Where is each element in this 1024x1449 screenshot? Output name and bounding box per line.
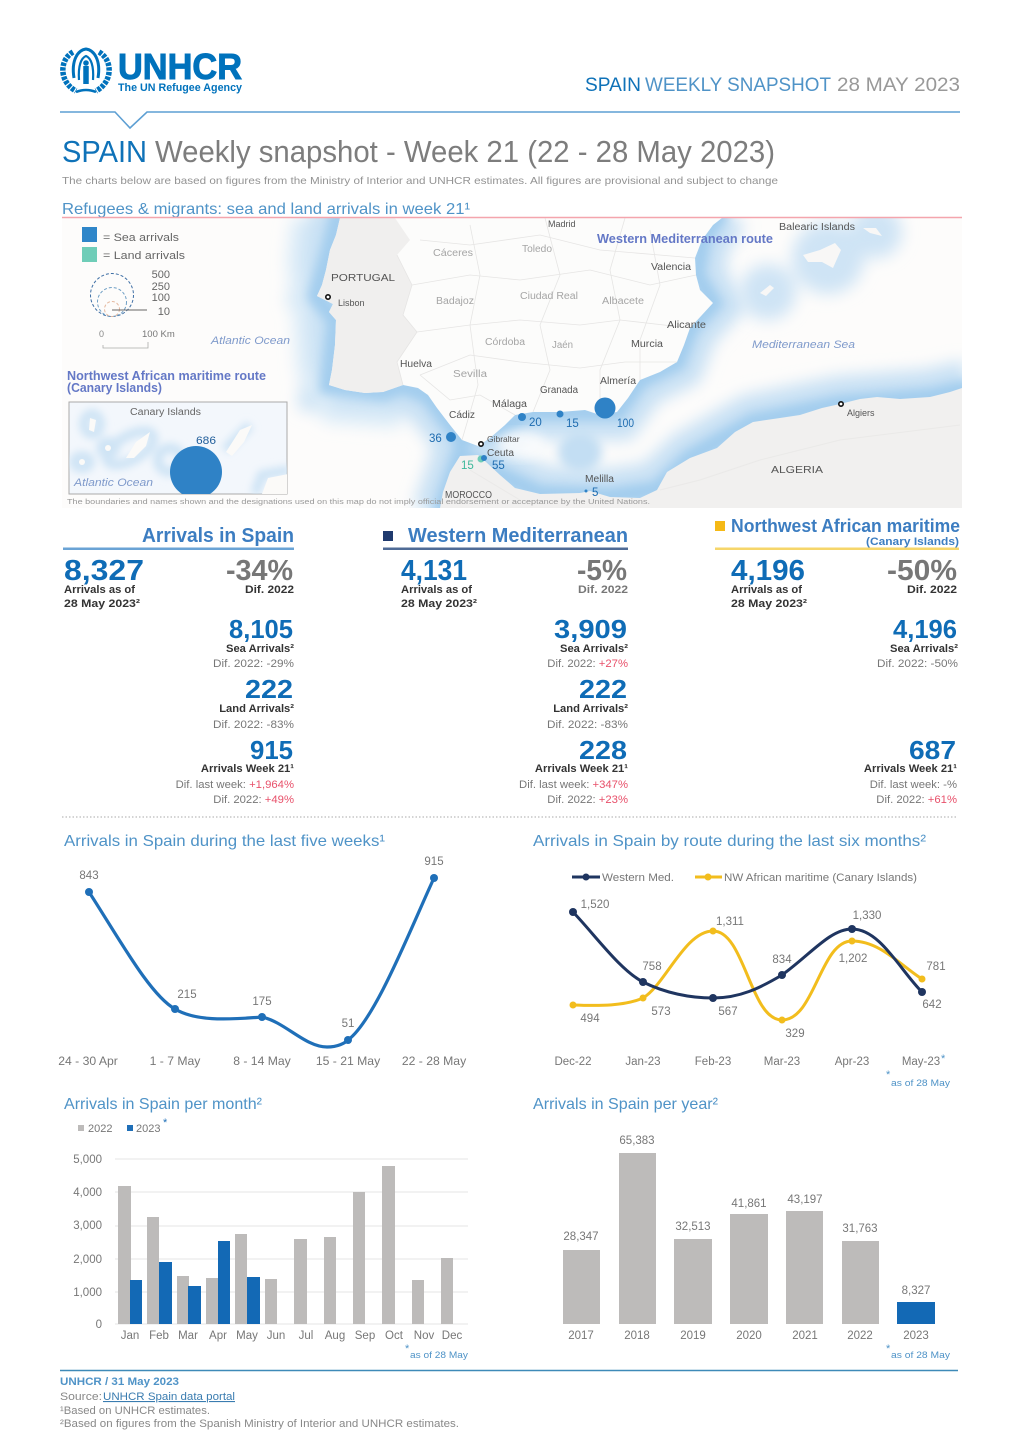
total arrivals: Arrivals as of — [64, 584, 135, 596]
value labels: 41,861 — [731, 1198, 767, 1210]
value labels: 843 — [79, 870, 99, 882]
scale bar — [99, 329, 175, 348]
chart heading: Arrivals in Spain per year² — [533, 1096, 719, 1113]
y axis labels: 0 — [96, 1319, 102, 1331]
legend labels: = Land arrivals — [103, 250, 186, 262]
place labels: Córdoba — [485, 337, 525, 348]
asterisk and note: * — [941, 1053, 946, 1065]
x axis labels: Dec — [442, 1330, 462, 1342]
sea arrivals — [547, 616, 628, 670]
x axis labels: Jan-23 — [625, 1056, 661, 1068]
total difference: -50% — [887, 555, 957, 587]
sea arrivals: 4,196 — [893, 616, 957, 644]
note — [886, 1343, 951, 1360]
place labels: Melilla — [585, 474, 614, 485]
inset map: Canary Islands — [69, 402, 290, 498]
place labels: ALGERIA — [771, 465, 823, 476]
weekly arrivals: 687 — [909, 737, 956, 765]
sea arrivals: Sea Arrivals² — [226, 643, 294, 655]
footer: ¹Based on UNHCR estimates. — [60, 1405, 210, 1417]
total arrivals: 28 May 2023² — [401, 598, 477, 610]
header rule with notch — [60, 112, 960, 128]
x axis labels: Apr — [209, 1330, 227, 1342]
y axis labels: 5,000 — [73, 1154, 102, 1166]
x axis labels: 2022 — [847, 1330, 873, 1342]
x axis labels: May-23 — [902, 1056, 940, 1068]
weekly arrivals: Dif. 2022: +49% — [213, 794, 294, 806]
x axis labels: Oct — [385, 1330, 404, 1342]
value labels: 758 — [642, 961, 662, 973]
place labels: Mediterranean Sea — [752, 339, 855, 351]
icon: laurel emblem — [63, 49, 109, 92]
x axis labels: Apr-23 — [835, 1056, 869, 1068]
proportional circles — [90, 274, 147, 316]
x axis labels: 2020 — [736, 1330, 762, 1342]
value labels: 32,513 — [675, 1221, 711, 1233]
x axis labels: 2019 — [680, 1330, 706, 1342]
note: * — [405, 1343, 410, 1355]
chart: per year — [533, 1096, 951, 1360]
chart legend: 2023 — [136, 1123, 160, 1135]
place labels: Cáceres — [433, 248, 473, 259]
total arrivals — [64, 555, 144, 610]
subtitle: The charts below are based on figures from the Ministry of Interior and UNHCR estimates. All figures are provisional and subject to change — [62, 175, 778, 187]
x axis labels: Jul — [299, 1330, 313, 1342]
weekly arrivals: Dif. last week: -% — [870, 779, 957, 791]
y axis labels: 4,000 — [73, 1187, 102, 1199]
place labels: Almería — [600, 376, 636, 387]
place labels: Murcia — [631, 339, 663, 350]
x axis labels — [554, 1056, 940, 1068]
map top rule — [62, 216, 962, 218]
marker: 36 — [429, 432, 456, 445]
bars 2023 — [130, 1241, 260, 1324]
bars 2022 — [118, 1166, 453, 1324]
x axis labels: Jun — [267, 1330, 285, 1342]
route label: Northwest African: (Canary Islands) — [67, 381, 162, 395]
value labels — [79, 856, 444, 1030]
place labels: Toledo — [522, 244, 552, 255]
x axis labels: 2023 — [903, 1330, 929, 1342]
total arrivals: Arrivals as of — [731, 584, 802, 596]
weekly arrivals — [176, 737, 294, 806]
weekly arrivals: 915 — [250, 737, 293, 765]
asterisk and note — [886, 1053, 951, 1088]
land arrivals: 222 — [245, 676, 293, 704]
map disclaimer: The boundaries and names shown and the designations used on this map do not imply official endorsement or acceptance by the United Nations. — [67, 499, 650, 506]
x axis labels: Aug — [325, 1330, 345, 1342]
place labels: Algiers — [847, 408, 875, 418]
city points — [326, 295, 843, 446]
x axis labels: Mar-23 — [764, 1056, 800, 1068]
circle values: 500 — [152, 269, 170, 281]
place labels: Ceuta — [487, 448, 514, 459]
land arrivals — [213, 676, 294, 731]
place labels: Ciudad Real — [520, 291, 578, 302]
marker: 20 — [518, 413, 542, 429]
marker: 100 — [594, 398, 634, 430]
value labels: 215 — [177, 989, 197, 1001]
weekly arrivals: Dif. 2022: +23% — [547, 794, 628, 806]
chart legend: Western Med. — [602, 872, 674, 884]
marker: Ceuta: 15 — [461, 460, 474, 472]
sea arrivals — [877, 616, 958, 670]
note: as of 28 May — [410, 1350, 469, 1360]
bars — [563, 1153, 935, 1324]
place labels: Sevilla — [453, 369, 487, 380]
place labels: Badajoz — [436, 296, 474, 307]
panel: map — [62, 206, 970, 515]
circle: Canary sea arrivals — [170, 446, 222, 498]
x axis labels: 2021 — [792, 1330, 818, 1342]
legend land swatch — [82, 247, 97, 262]
value labels: 51 — [342, 1018, 354, 1030]
route label: Northwest African: Northwest African maritime route — [67, 369, 266, 383]
total arrivals: 8,327 — [64, 555, 144, 587]
place labels: Balearic Islands — [779, 222, 855, 233]
x axis labels — [121, 1330, 462, 1342]
sea arrivals: Dif. 2022: -29% — [213, 658, 294, 670]
x axis labels: 15 - 21 May — [316, 1054, 381, 1068]
header right label — [585, 75, 960, 96]
chart heading: Arrivals in Spain by route during the last six months² — [533, 833, 927, 850]
sea arrivals — [213, 616, 294, 670]
footer: UNHCR Spain data portal — [103, 1391, 235, 1403]
marker: 100: 100 — [617, 418, 634, 430]
land arrivals: Dif. 2022: -83% — [213, 719, 294, 731]
land arrivals: 222 — [579, 676, 627, 704]
place labels: Valencia — [651, 262, 691, 273]
total arrivals: 28 May 2023² — [64, 598, 140, 610]
place labels: Madrid — [548, 219, 576, 229]
x axis labels: 2017 — [568, 1330, 594, 1342]
x axis labels: 1 - 7 May — [150, 1054, 201, 1068]
inset map: Canary Islands: Canary Islands — [130, 407, 201, 418]
chart legend — [572, 872, 917, 884]
value labels: 642 — [922, 999, 942, 1011]
logo wordmark: UNHCR — [118, 46, 242, 87]
place labels: Granada — [540, 385, 578, 396]
weekly arrivals: Dif. last week: +347% — [519, 779, 628, 791]
marker: Melilla: 5 — [592, 487, 598, 499]
place labels: Lisbon — [338, 298, 365, 308]
value labels: 1,202 — [839, 953, 867, 965]
value labels: 31,763 — [842, 1223, 878, 1235]
marker: 15: 15 — [566, 418, 579, 430]
weekly arrivals: Arrivals Week 21¹ — [535, 763, 628, 775]
x axis labels: Feb — [149, 1330, 169, 1342]
series: Western Med — [569, 908, 926, 1002]
place labels: MOROCCO — [445, 490, 492, 501]
scale bar: 0 — [99, 329, 104, 339]
value labels: 65,383 — [619, 1135, 655, 1147]
header right label: SPAIN — [585, 75, 641, 96]
sea arrivals: Sea Arrivals² — [890, 643, 958, 655]
land: Portugal — [317, 218, 417, 393]
chart: by route last six months — [533, 833, 951, 1088]
value labels: 8,327 — [902, 1285, 930, 1297]
x axis labels: Feb-23 — [695, 1056, 731, 1068]
map markers — [326, 295, 843, 499]
legend sea swatch — [82, 227, 97, 242]
x axis labels — [58, 1054, 467, 1068]
value labels: 43,197 — [787, 1194, 823, 1206]
value labels — [580, 899, 946, 1040]
value labels: 567 — [718, 1006, 738, 1018]
chart legend — [78, 1117, 168, 1135]
weekly arrivals: Arrivals Week 21¹ — [864, 763, 957, 775]
total arrivals — [731, 555, 807, 610]
value labels: 329 — [785, 1028, 805, 1040]
value labels: 28,347 — [563, 1231, 599, 1243]
marker: 36: 36 — [429, 433, 442, 445]
x axis labels: 8 - 14 May — [233, 1054, 292, 1068]
total arrivals: 28 May 2023² — [731, 598, 807, 610]
land arrivals: Land Arrivals² — [219, 703, 294, 715]
province borders — [397, 218, 696, 440]
legend labels: = Sea arrivals — [103, 232, 180, 244]
place labels: Huelva — [400, 359, 432, 370]
title: Weekly snapshot - Week 21 (22 - 28 May 2023) — [155, 134, 775, 169]
line series — [85, 874, 438, 1047]
circle values — [152, 269, 170, 318]
inset map: Canary Islands: 686 — [196, 435, 216, 447]
x axis labels: 22 - 28 May — [402, 1054, 467, 1068]
x axis labels: 24 - 30 Apr — [58, 1054, 118, 1068]
total difference: -34% — [226, 555, 293, 587]
x axis labels: Jan — [121, 1330, 139, 1342]
x axis labels: Sep — [355, 1330, 375, 1342]
value labels — [563, 1135, 930, 1297]
total arrivals: Arrivals as of — [401, 584, 472, 596]
y axis labels — [73, 1154, 102, 1331]
value labels: 834 — [772, 954, 792, 966]
weekly arrivals: Arrivals Week 21¹ — [201, 763, 294, 775]
sea arrivals: Dif. 2022: +27% — [547, 658, 628, 670]
x axis labels: Dec-22 — [554, 1056, 592, 1068]
route label: Northwest African — [67, 369, 266, 395]
note — [405, 1343, 469, 1360]
sea coastal glow: near shore — [317, 210, 970, 515]
chart heading: Arrivals in Spain during the last five weeks¹ — [64, 833, 385, 850]
value labels: 175 — [252, 996, 272, 1008]
land: North Africa — [440, 388, 962, 508]
scale bar: 100 Km — [142, 329, 175, 340]
x axis labels: 2018 — [624, 1330, 650, 1342]
weekly arrivals: 228 — [579, 737, 627, 765]
sea arrivals: 3,909 — [554, 616, 627, 644]
place labels: Gibraltar — [487, 434, 520, 444]
header right label: WEEKLY SNAPSHOT — [645, 75, 831, 96]
land arrivals — [547, 676, 628, 731]
footer: UNHCR / 31 May 2023 — [60, 1376, 179, 1388]
place labels: Atlantic Ocean — [210, 335, 290, 347]
series: NW African maritime — [570, 928, 926, 1024]
place labels: Cádiz — [449, 410, 475, 421]
circle values: 10 — [158, 306, 170, 318]
x axis labels: Mar — [178, 1330, 198, 1342]
heading — [715, 515, 960, 550]
weekly arrivals — [864, 737, 957, 806]
place labels — [210, 219, 875, 501]
total arrivals: 4,131 — [401, 555, 467, 587]
footer: Source: — [60, 1391, 102, 1403]
marker: Ceuta — [461, 455, 505, 472]
chart legend: NW African maritime (Canary Islands) — [724, 872, 917, 884]
weekly arrivals — [519, 737, 628, 806]
y axis labels: 3,000 — [73, 1220, 102, 1232]
total difference: -5% — [577, 555, 627, 587]
footer: ²Based on figures from the Spanish Ministry of Interior and UNHCR estimates. — [60, 1418, 459, 1430]
y axis labels: 2,000 — [73, 1254, 102, 1266]
chart legend: * — [163, 1117, 168, 1129]
total difference: Dif. 2022 — [907, 584, 957, 596]
marker: 15 — [556, 410, 579, 430]
marker: 20: 20 — [529, 417, 542, 429]
place labels: Albacete — [602, 296, 644, 307]
sea coastal glow: wide — [295, 210, 970, 515]
value labels: 1,330 — [853, 910, 881, 922]
x axis labels: May — [236, 1330, 258, 1342]
place labels: Jaén — [552, 340, 573, 351]
circle values: 250 — [152, 281, 170, 293]
panel: Western Mediterranean — [383, 525, 628, 806]
panel: Arrivals in Spain — [63, 525, 294, 806]
heading: Northwest African maritime — [731, 515, 960, 536]
chart: last five weeks — [58, 833, 467, 1068]
asterisk and note: * — [886, 1069, 891, 1081]
marker: Ceuta: 55 — [492, 460, 505, 472]
header right label: 28 MAY 2023 — [837, 75, 960, 96]
weekly arrivals: Dif. last week: +1,964% — [176, 779, 294, 791]
chart legend: 2022 — [88, 1123, 112, 1135]
value labels: 1,311 — [716, 916, 744, 928]
heading: Arrivals in Spain — [142, 525, 294, 547]
chart heading: Arrivals in Spain per month² — [64, 1096, 263, 1113]
total difference: Dif. 2022 — [578, 584, 628, 596]
place labels: PORTUGAL — [331, 273, 395, 284]
weekly arrivals: Dif. 2022: +61% — [876, 794, 957, 806]
value labels: 915 — [424, 856, 444, 868]
route label: Western Mediterranean: Western Mediterranean route — [597, 232, 773, 246]
place labels: Málaga — [492, 399, 527, 410]
sea arrivals: Dif. 2022: -50% — [877, 658, 958, 670]
panel: Northwest African maritime — [715, 515, 960, 806]
chart: per month — [64, 1096, 469, 1360]
value labels: 1,520 — [581, 899, 609, 911]
land arrivals: Land Arrivals² — [553, 703, 628, 715]
place labels: Alicante — [667, 320, 706, 331]
value labels: 573 — [651, 1006, 671, 1018]
legend — [82, 227, 186, 348]
note: as of 28 May — [891, 1350, 951, 1360]
heading: (Canary Islands) — [866, 536, 959, 548]
circle values: 100 — [152, 292, 170, 304]
title: SPAIN — [62, 134, 147, 169]
land arrivals: Dif. 2022: -83% — [547, 719, 628, 731]
land: Iberia — [317, 218, 722, 446]
map heading: Refugees & migrants: sea and land arrivals in week 21¹ — [62, 201, 470, 218]
UNHCR logo — [63, 46, 243, 94]
total arrivals — [401, 555, 477, 610]
marker: Melilla — [584, 487, 598, 499]
y axis labels: 1,000 — [73, 1287, 102, 1299]
legend labels — [103, 232, 186, 262]
sea arrivals: Sea Arrivals² — [560, 643, 628, 655]
total arrivals: 4,196 — [731, 555, 805, 587]
island glow — [740, 206, 902, 320]
value labels: 781 — [926, 961, 946, 973]
land: Balearic islands — [803, 243, 841, 268]
inset map: Canary Islands: Atlantic Ocean — [73, 477, 153, 489]
asterisk and note: as of 28 May — [891, 1078, 951, 1088]
sea arrivals: 8,105 — [229, 616, 293, 644]
note: * — [886, 1343, 891, 1355]
value labels: 494 — [580, 1013, 600, 1025]
total difference: Dif. 2022 — [245, 584, 294, 596]
x axis labels: Nov — [414, 1330, 434, 1342]
logo tagline: The UN Refugee Agency — [118, 82, 243, 94]
x axis labels — [568, 1330, 929, 1342]
heading: Western Mediterranean — [408, 525, 628, 547]
footer — [60, 1376, 459, 1430]
